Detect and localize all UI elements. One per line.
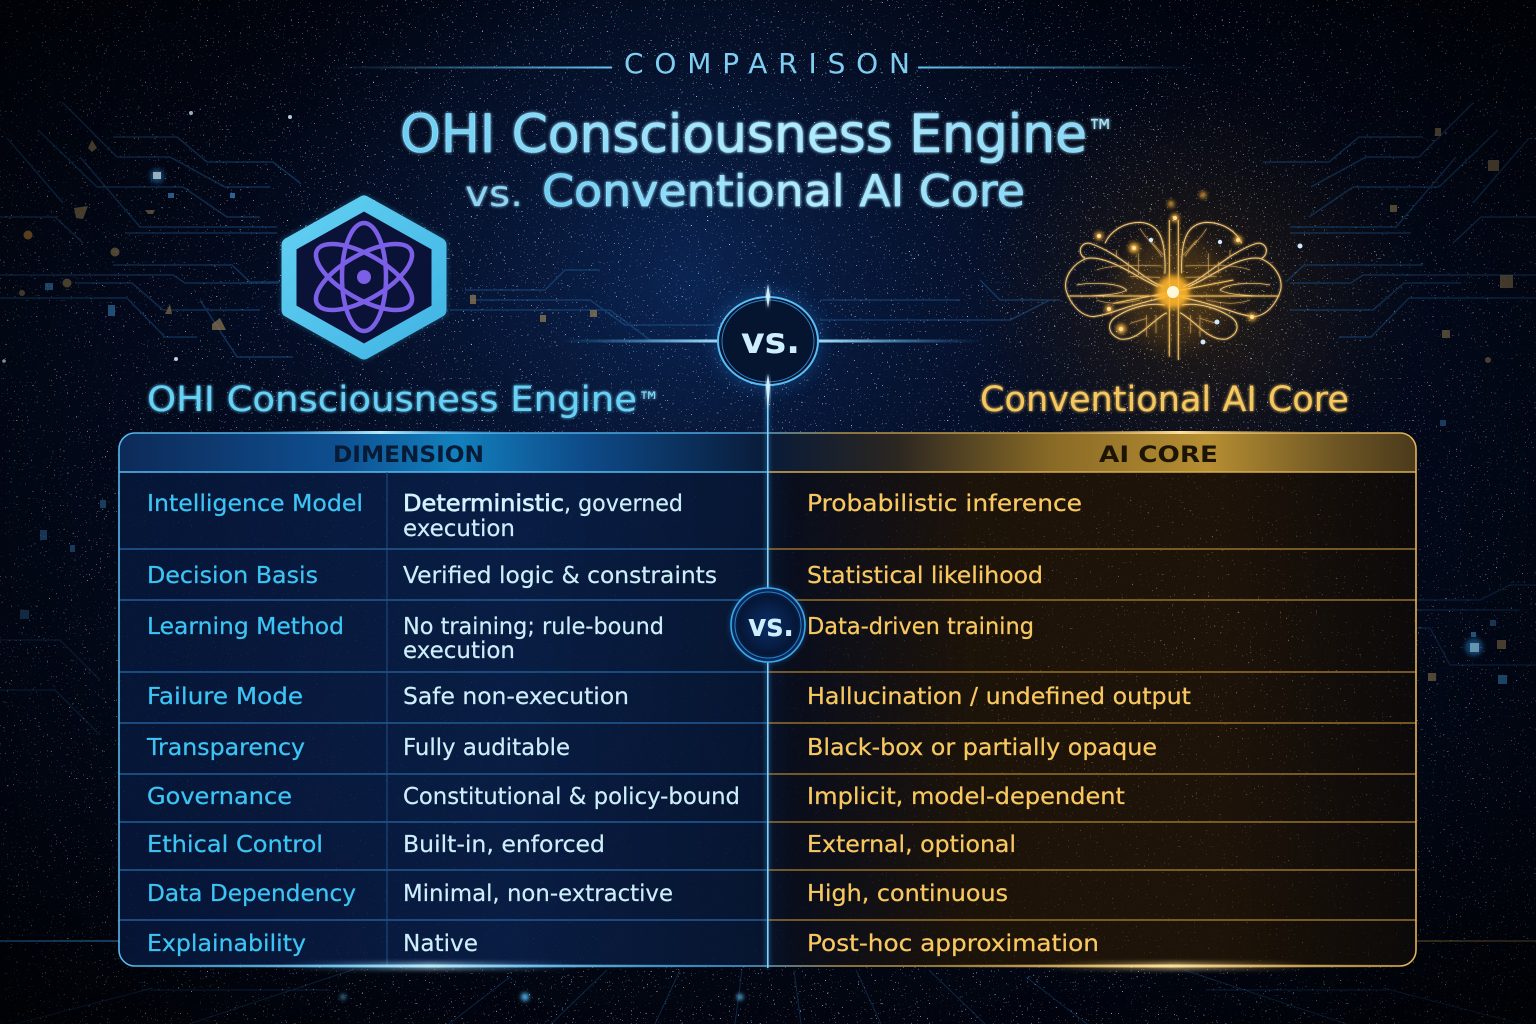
row: Explainability: Explainability [147, 931, 306, 957]
row: Decision Basis: Statistical likelihood [807, 563, 1043, 589]
row: Intelligence Model [147, 491, 1082, 542]
row: Governance [147, 784, 1125, 810]
title [400, 104, 1115, 217]
row: Learning Method: Data-driven training [807, 614, 1034, 640]
row: Failure Mode [147, 684, 1191, 710]
table header row: AI CORE [1099, 443, 1218, 468]
vs badge: top [560, 284, 983, 410]
column heading: OHI Consciousness Engine: ™ [638, 387, 660, 418]
row: Intelligence Model: Intelligence Model [147, 491, 363, 517]
row: Decision Basis [147, 563, 1043, 589]
row: Intelligence Model: Deterministic [403, 491, 564, 517]
table header row: DIMENSION [333, 443, 484, 468]
row: Learning Method: No training; rule-bound [403, 614, 664, 640]
row: Ethical Control: External, optional [807, 832, 1016, 858]
row: Governance: Constitutional & policy-bound [403, 784, 740, 810]
row: Decision Basis: Verified logic & constraints [403, 563, 717, 589]
title: Conventional AI Core [542, 166, 1025, 217]
row: Governance: Governance [147, 784, 292, 810]
row: Intelligence Model: Probabilistic inference [807, 491, 1082, 517]
column heading: OHI Consciousness Engine: OHI Consciousness Engine [147, 380, 637, 420]
row: Failure Mode: Hallucination / undefined output [807, 684, 1191, 710]
icon: glowing circuit brain [1066, 192, 1302, 360]
row: Ethical Control [147, 832, 1016, 858]
row: Governance: Implicit, model-dependent [807, 784, 1125, 810]
table header row [119, 433, 1416, 472]
row: Ethical Control: Built-in, enforced [403, 832, 605, 858]
row: Data Dependency [147, 881, 1008, 907]
row: Learning Method: Learning Method [147, 614, 344, 640]
row: Intelligence Model: execution [403, 516, 515, 542]
vs badge: table [730, 587, 806, 663]
row: Explainability: Native [403, 931, 478, 957]
row: Data Dependency: Data Dependency [147, 881, 356, 907]
row: Failure Mode: Failure Mode [147, 684, 303, 710]
comparison table [119, 431, 1416, 970]
title: ™ [1087, 113, 1115, 154]
kicker: COMPARISON: COMPARISON [624, 47, 910, 80]
row: Decision Basis: Decision Basis [147, 563, 318, 589]
row: Transparency: Transparency [146, 735, 305, 761]
row: Learning Method: execution [403, 638, 515, 664]
center divider line [765, 385, 770, 968]
row: Transparency: Black-box or partially opaque [807, 735, 1157, 761]
row: Explainability [147, 931, 1099, 957]
row: Data Dependency: Minimal, non-extractive [403, 881, 673, 907]
title: vs. [465, 174, 523, 215]
row: Learning Method [147, 614, 1034, 664]
row: Intelligence Model: , governed [564, 491, 683, 517]
title: OHI Consciousness Engine [400, 104, 1087, 165]
icon: hexagon atom [281, 194, 447, 361]
vs badge: table: vs. [748, 608, 794, 644]
vs badge: top: vs. [741, 321, 800, 362]
column heading: Conventional AI Core: Conventional AI Core [980, 380, 1349, 420]
row: Transparency: Fully auditable [403, 735, 570, 761]
row: Transparency [146, 735, 1157, 761]
row: Data Dependency: High, continuous [807, 881, 1008, 907]
row: Failure Mode: Safe non-execution [403, 684, 629, 710]
row: Explainability: Post-hoc approximation [807, 931, 1099, 957]
row: Ethical Control: Ethical Control [147, 832, 323, 858]
